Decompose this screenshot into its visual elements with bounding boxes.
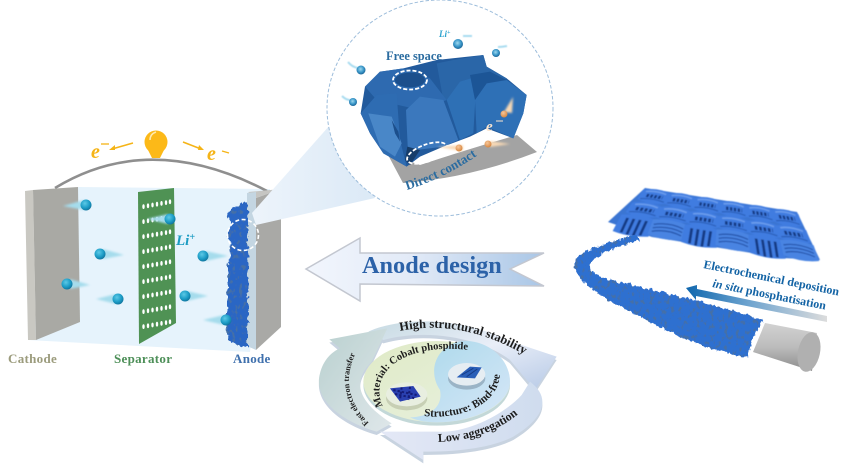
material label path [379, 349, 470, 406]
panel: fabric electrode [575, 187, 841, 374]
electrons in circle: e [486, 119, 493, 135]
structure label: Structure: Bind-free [424, 374, 500, 417]
dashed circle outline [327, 0, 553, 216]
right electron label and arrow: e [207, 143, 216, 165]
high structural stability label: High structural stability [398, 320, 527, 355]
free space marker [393, 70, 427, 90]
cobalt phosphide sample platform [386, 382, 427, 410]
low aggregation label: Low aggregation [438, 410, 518, 442]
lithium ion label: + [189, 232, 195, 243]
anode nanostructure layer [227, 202, 248, 347]
low aggregation label path [438, 410, 523, 442]
cathode plate [25, 187, 80, 340]
panel: design cycle diagram [318, 320, 556, 464]
high structural stability label path [400, 328, 530, 358]
phosphatisation label: in situ phosphatisation [711, 276, 828, 313]
nanosheet fabric sheet [608, 187, 820, 263]
electrons in circle [437, 97, 513, 152]
anode label: Anode [233, 351, 271, 366]
structure label path [424, 372, 500, 417]
electrolyte chamber [28, 187, 270, 352]
separator membrane [138, 188, 176, 344]
magnification cone [252, 125, 375, 225]
free space label: Free space [386, 49, 442, 63]
lithium ion label in circle: Li [439, 29, 447, 39]
fast electron transfer label path [349, 345, 369, 423]
wire core cylinder [753, 323, 824, 374]
callout circle marker on anode [228, 220, 258, 250]
icon: light bulb [144, 130, 168, 158]
left electron label and arrow [91, 141, 133, 163]
cycle arrows [319, 321, 557, 463]
material label: Material: Cobalt phosphide [373, 342, 468, 408]
lithium ions in circle [342, 36, 507, 106]
coated fibre [575, 235, 763, 358]
arrow: Anode design [306, 238, 544, 301]
nanosheet array [361, 55, 527, 167]
arrow: deposition direction [686, 285, 827, 322]
direct contact marker [404, 138, 450, 168]
fast electron transfer label: Fast electron transfer [344, 352, 369, 427]
cathode label: Cathode [8, 351, 57, 366]
external circuit wire [55, 160, 267, 191]
binder-free sample platform [448, 363, 485, 390]
direct contact label path [407, 155, 478, 190]
separator label: Separator [114, 351, 172, 366]
lithium ion label in circle: + [447, 30, 451, 36]
lithium ion label: Li [176, 233, 189, 249]
anode plate [247, 189, 281, 350]
anode design heading: Anode design [362, 252, 502, 279]
current collector substrate [387, 135, 537, 183]
panel: magnified anode circle [326, 0, 554, 216]
deposition label: Electrochemical deposition [702, 257, 841, 299]
lithium ions with trails [62, 200, 232, 326]
left electron label and arrow: e [91, 141, 100, 163]
inner yin-yang disc [363, 341, 510, 426]
direct contact label: Direct contact [404, 150, 477, 190]
right electron label and arrow [183, 142, 229, 165]
panel: battery schematic [8, 130, 281, 366]
